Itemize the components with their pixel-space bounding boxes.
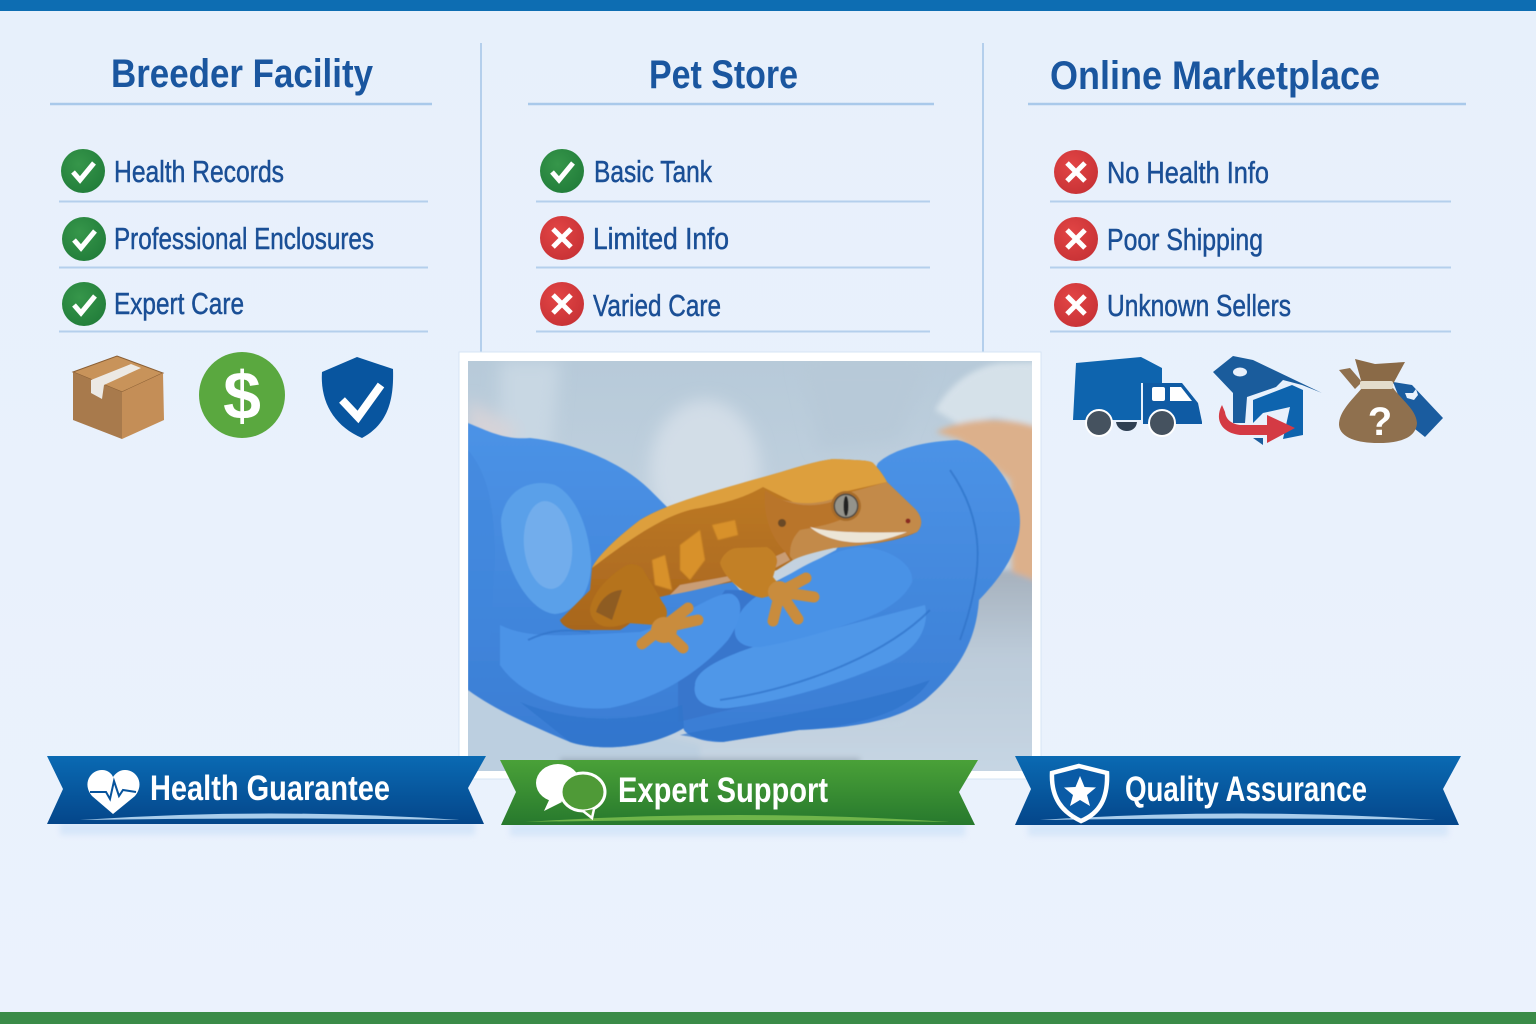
row: Varied Care: Varied Care (593, 288, 721, 323)
ribbon: Quality Assurance: Quality Assurance (1125, 770, 1367, 809)
cheek and snout (770, 482, 921, 560)
ribbon: Expert Support (500, 760, 978, 836)
ribbon: Quality Assurance (1015, 756, 1461, 836)
photo: gloved hands holding crested gecko (459, 352, 1041, 780)
icon: delivery truck (1073, 357, 1202, 436)
icon: shield with star (1052, 766, 1107, 821)
left glove (468, 423, 743, 747)
row: Unknown Sellers: Unknown Sellers (1107, 288, 1291, 323)
row: Basic Tank (536, 149, 930, 202)
body patches (652, 520, 738, 590)
icon: shield check (322, 357, 393, 438)
heading: Online Marketplace: Online Marketplace (1050, 54, 1380, 98)
row: Professional Enclosures (59, 217, 428, 268)
row: No Health Info: No Health Info (1107, 155, 1269, 190)
bottom bar (0, 1012, 1536, 1024)
gecko (560, 459, 921, 648)
icon: cardboard box (73, 356, 164, 439)
row: Limited Info (536, 216, 930, 268)
icon: heart with pulse (87, 770, 140, 814)
row: Expert Care (59, 282, 428, 332)
icon: dollar coin (199, 352, 285, 438)
row: Professional Enclosures: Professional Enclosures (114, 221, 374, 256)
row: Limited Info: Limited Info (593, 221, 729, 256)
back leg (590, 585, 668, 626)
row: No Health Info (1050, 150, 1451, 202)
heading: Pet Store: Pet Store (649, 53, 798, 97)
icon: speech bubbles (536, 764, 605, 818)
shadow between hands (678, 590, 756, 720)
ribbon: Health Guarantee: Health Guarantee (150, 769, 390, 808)
heading: Breeder Facility: Breeder Facility (111, 52, 374, 96)
right glove (675, 440, 1020, 742)
ribbon: Expert Support: Expert Support (618, 771, 828, 810)
top bar (0, 0, 1536, 11)
row: Health Records (59, 149, 428, 202)
row: Health Records: Health Records (114, 154, 284, 189)
crest (592, 459, 887, 568)
panel: Breeder Facility (50, 52, 432, 439)
gloves (468, 423, 1020, 747)
row: Unknown Sellers (1050, 283, 1451, 332)
panel: Online Marketplace (1028, 54, 1466, 445)
row: Basic Tank: Basic Tank (594, 154, 712, 189)
icon: mystery money bag (1339, 359, 1443, 444)
row: Varied Care (536, 282, 930, 332)
ribbon: Health Guarantee (47, 756, 486, 835)
left lower finger (500, 594, 740, 709)
icon: dollar coin: $ (223, 358, 261, 434)
front leg (720, 547, 785, 598)
panel: Pet Store (528, 53, 934, 332)
right lower finger (695, 605, 926, 708)
icon: mystery money bag: ? (1368, 400, 1392, 444)
eye (831, 491, 861, 521)
row: Poor Shipping (1050, 217, 1451, 268)
right upper finger (734, 560, 912, 647)
icon: price tag house with return arrow (1213, 356, 1322, 445)
row: Expert Care: Expert Care (114, 286, 244, 321)
gecko body (560, 459, 921, 630)
left thumb (501, 483, 591, 614)
row: Poor Shipping: Poor Shipping (1107, 222, 1263, 257)
mouth stripe (810, 527, 907, 542)
